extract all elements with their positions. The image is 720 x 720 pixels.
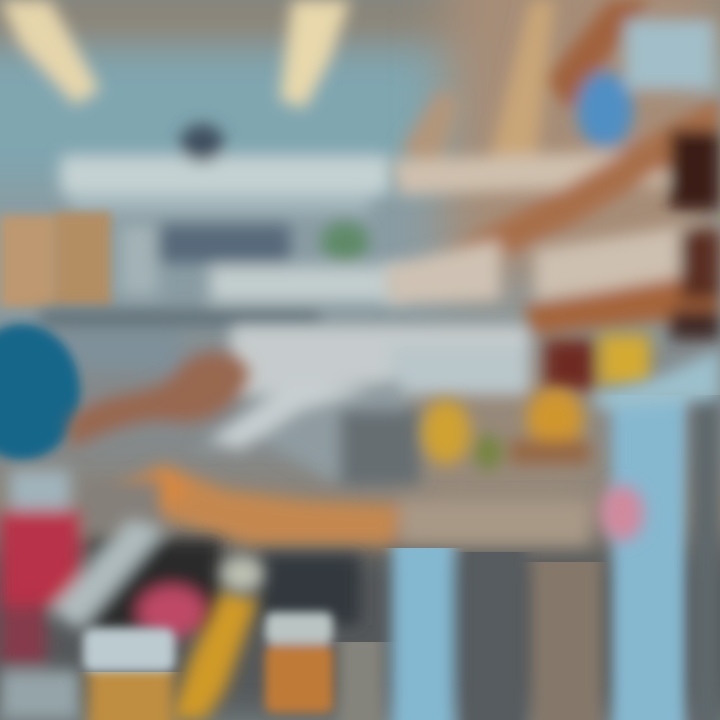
- lower middle columns: [338, 548, 602, 720]
- ceiling lights: [0, 0, 350, 108]
- bottom jars and yellow bottle: [83, 556, 333, 720]
- left jar: [88, 672, 174, 720]
- yellow bottle: [170, 590, 258, 720]
- left jar lid: [83, 628, 175, 672]
- arm: [68, 352, 250, 448]
- right blue column: [590, 350, 720, 720]
- upper white shelf: [60, 124, 390, 214]
- central white stacks of goods: [195, 325, 530, 485]
- orange wooden counter: [110, 465, 590, 545]
- tan boxes on left shelf: [0, 212, 111, 307]
- bottle cap: [220, 556, 264, 592]
- right jar: [265, 612, 333, 713]
- yellow products on middle right: [422, 388, 590, 470]
- right wooden shelves: [385, 0, 720, 390]
- middle shelf goods: [40, 222, 400, 370]
- bottom left red and grey products: [0, 470, 360, 720]
- shirt: [0, 324, 80, 460]
- shopper arm and teal shirt: [0, 324, 250, 460]
